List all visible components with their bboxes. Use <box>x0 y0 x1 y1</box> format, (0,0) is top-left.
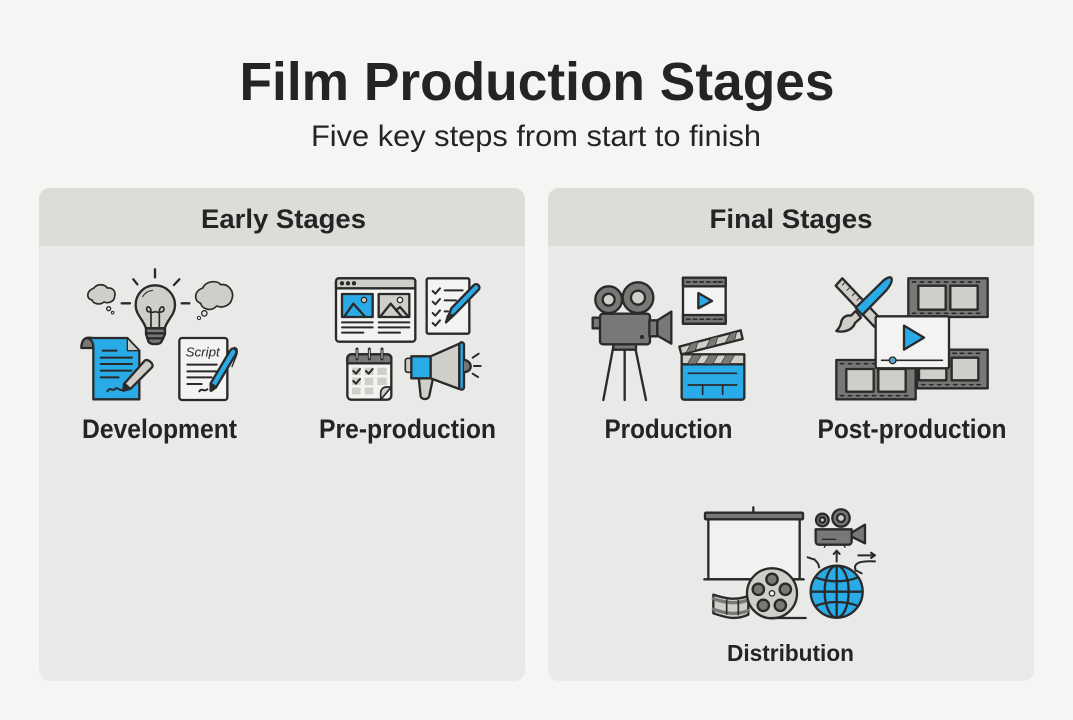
title: Film Production Stages <box>240 52 834 112</box>
panel: early stages <box>39 188 525 681</box>
icon: development: Script <box>186 345 221 360</box>
heading: final stages: Final Stages <box>710 204 872 234</box>
icon: distribution <box>704 507 875 618</box>
icon: development <box>81 269 237 400</box>
label: post-production: Post-production <box>818 414 1006 444</box>
label: production: Production <box>604 414 732 444</box>
subtitle: Five key steps from start to finish <box>311 120 761 153</box>
label: development: Development <box>82 414 237 444</box>
icon: pre-production <box>336 278 481 400</box>
label: pre-production: Pre-production <box>319 414 496 444</box>
panel: final stages <box>548 188 1034 681</box>
icon: post-production <box>836 277 988 399</box>
icon: production <box>593 278 744 400</box>
heading: early stages: Early Stages <box>201 204 366 234</box>
label: distribution: Distribution <box>727 640 854 666</box>
